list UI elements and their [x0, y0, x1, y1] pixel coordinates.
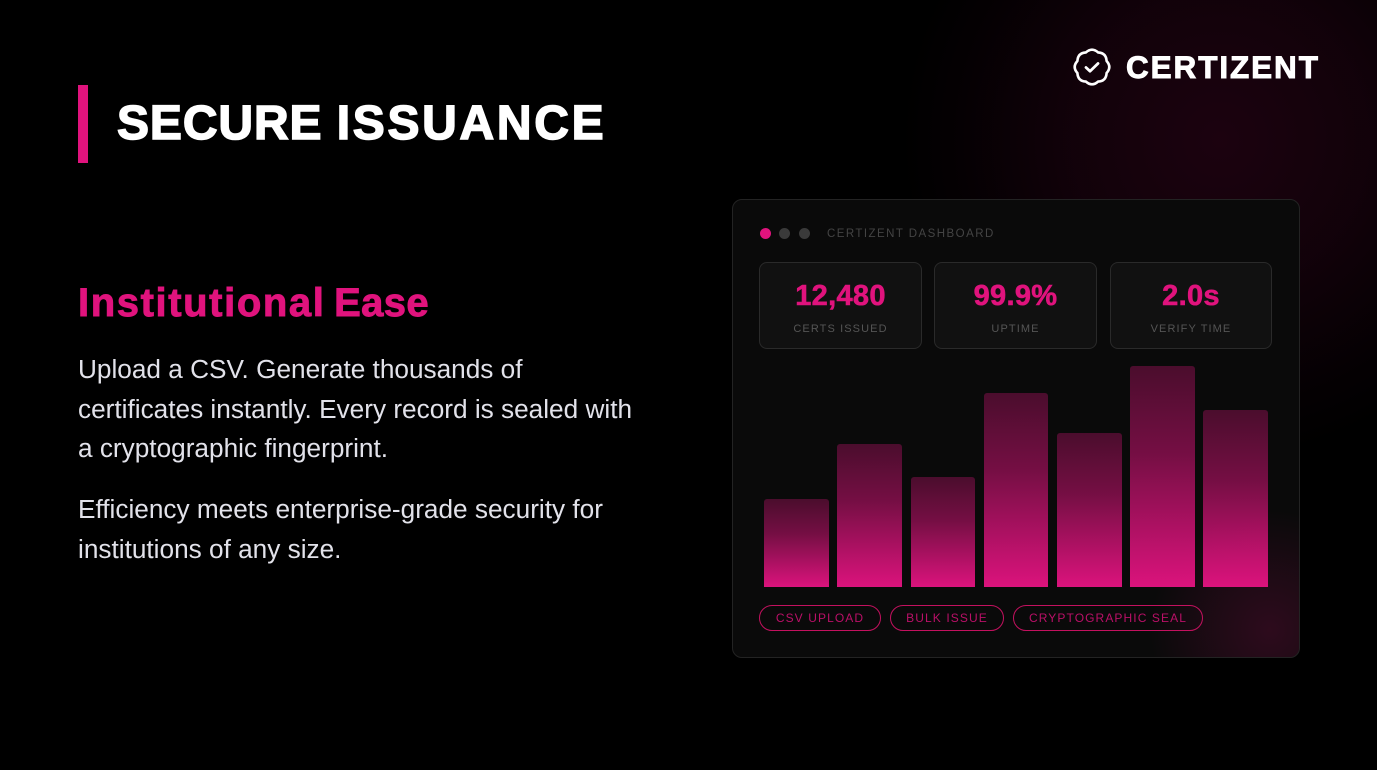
stat: verify time [1110, 262, 1272, 349]
subheading: Institutional Ease [78, 281, 429, 325]
bar 3 [910, 477, 975, 587]
title: SECURE ISSUANCE [117, 97, 606, 150]
bar 6 [1130, 366, 1194, 587]
value: 99.9% [974, 280, 1057, 312]
tag: csv upload [759, 605, 881, 631]
title accent bar [78, 85, 88, 163]
paragraph 1: a cryptographic fingerprint. [78, 433, 388, 463]
tag: cryptographic seal: CRYPTOGRAPHIC SEAL [1029, 611, 1187, 625]
dot: active [760, 228, 770, 238]
tag: cryptographic seal [1013, 605, 1203, 631]
label: UPTIME [991, 323, 1040, 335]
bar 4 [984, 393, 1048, 587]
value: 12,480 [795, 280, 886, 312]
icon: badge check [1073, 48, 1111, 86]
paragraph 2: institutions of any size. [78, 534, 341, 564]
dashboard label: CERTIZENT DASHBOARD [827, 228, 995, 240]
logo wordmark: CERTIZENT [1126, 49, 1320, 85]
background glow [900, 0, 1377, 460]
logo [1073, 48, 1320, 86]
bar 1 [764, 499, 828, 587]
tag: bulk issue [890, 605, 1004, 631]
paragraph 1: certificates instantly. Every record is sealed with [78, 394, 632, 424]
paragraph 2: Efficiency meets enterprise-grade security for [78, 494, 603, 524]
paragraph 1: Upload a CSV. Generate thousands of [78, 354, 523, 384]
corner glow [1150, 510, 1377, 750]
bar 2 [837, 444, 902, 587]
stat: certs issued [759, 262, 922, 349]
dot: third [799, 228, 810, 238]
bar 5 [1057, 433, 1122, 587]
paragraph 1 [78, 354, 632, 463]
bar 7 [1203, 410, 1268, 587]
dot: second [779, 228, 790, 238]
stat: uptime [934, 262, 1097, 349]
panel: dashboard [732, 199, 1300, 658]
label: VERIFY TIME [1151, 323, 1231, 335]
paragraph 2 [78, 494, 603, 564]
window dots [760, 228, 810, 239]
label: CERTS ISSUED [793, 323, 888, 335]
tag: csv upload: CSV UPLOAD [776, 611, 864, 625]
tag: bulk issue: BULK ISSUE [906, 611, 988, 625]
value: 2.0s [1162, 280, 1220, 312]
